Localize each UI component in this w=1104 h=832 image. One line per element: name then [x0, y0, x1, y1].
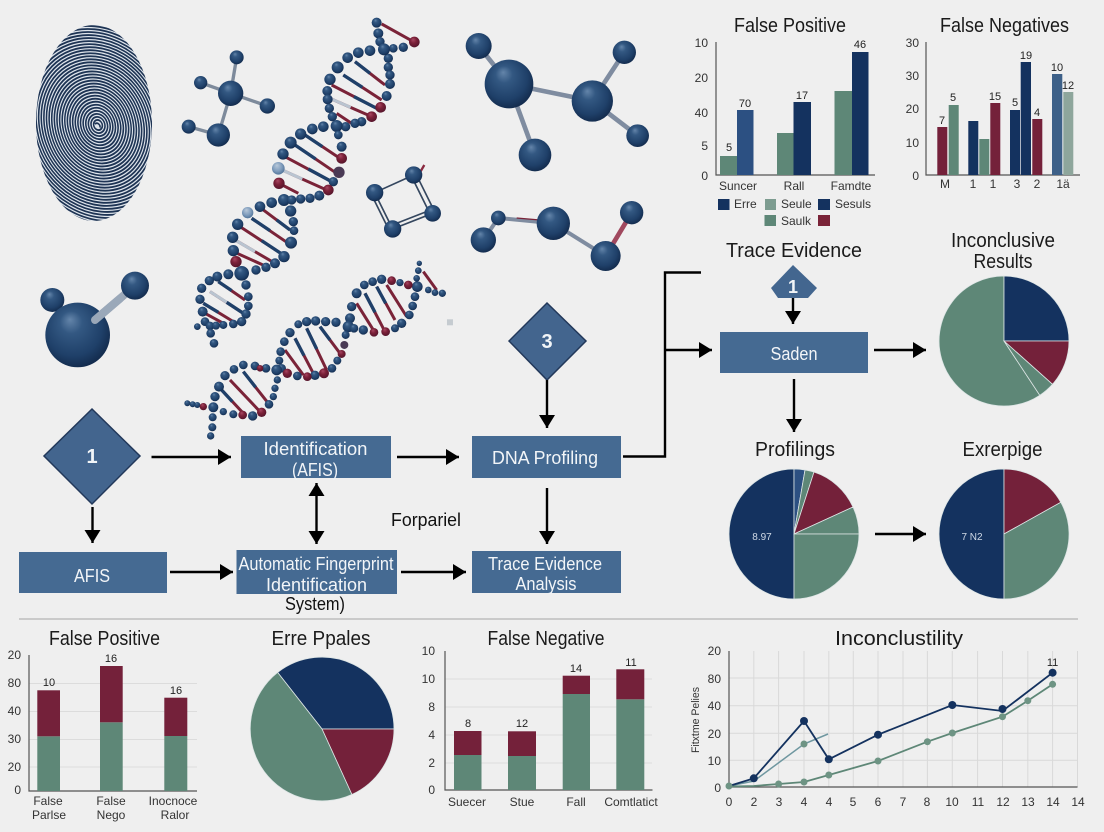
chart: inconclusivity line chart: Fitxtme Pelies: [690, 687, 702, 753]
chart: inconclusivity line chart: 8: [924, 795, 931, 809]
icon: water molecule: [40, 272, 149, 367]
chart: false negatives top: 30: [906, 36, 919, 50]
pie: profilings: [729, 438, 859, 599]
arrows: left flow: [92, 380, 547, 572]
icon: fingerprint: [36, 25, 152, 221]
box: identification AFIS: Identification: [264, 439, 368, 459]
chart: false positive top: 5: [726, 142, 732, 154]
chart: false negatives top: 30: [906, 69, 919, 83]
chart: inconclusivity line chart: 20: [708, 727, 721, 741]
icon: DNA helix lower: [184, 261, 453, 440]
chart: false negative stacked bars: Suecer: [448, 795, 486, 809]
chart: false positive stacked bars: 80: [8, 676, 21, 690]
chart: false negatives top: 1: [970, 177, 977, 191]
pie: erre ppales: [250, 627, 394, 801]
chart: false negatives top: False Negatives: [940, 14, 1069, 37]
chart: false negatives top: [906, 14, 1080, 191]
chart: false positive top: 70: [739, 98, 751, 110]
legend: false positive: Erre: [734, 197, 757, 211]
chart: false negatives top: 12: [1062, 80, 1074, 92]
chart: inconclusivity line chart: 11: [972, 795, 985, 809]
legend: false positive: [718, 197, 871, 228]
chart: false positive stacked bars: 40: [8, 704, 21, 718]
chart: false negatives top: 4: [1034, 107, 1040, 119]
diamond: step 1: [44, 409, 140, 504]
chart: inconclusivity line chart: 10: [708, 754, 721, 768]
divider: [19, 618, 1078, 620]
chart: inconclusivity line chart: 40: [708, 699, 721, 713]
chart: inconclusivity line chart: 14: [1071, 795, 1085, 809]
diamond: trace evidence step 1: [771, 265, 817, 298]
chart: false negative stacked bars: 10: [422, 672, 435, 686]
arrows: right flow: [793, 298, 926, 534]
chart: false positive stacked bars: False: [33, 794, 63, 808]
chart: false negative stacked bars: Fall: [566, 795, 586, 809]
diamond: step 3: 3: [541, 331, 553, 353]
legend: false positive: Saulk: [781, 214, 812, 228]
box: AFIS: [19, 552, 167, 593]
chart: false negative stacked bars: 8: [428, 700, 435, 714]
pie: inconclusive results: Inconclusive: [951, 229, 1055, 252]
chart: inconclusivity line chart: Inconclustility: [835, 627, 964, 650]
pie: profilings: Profilings: [755, 438, 835, 461]
chart: false positive stacked bars: 16: [105, 653, 117, 665]
chart: false positive stacked bars: Inocnoce: [149, 794, 198, 808]
chart: false negatives top: M: [940, 177, 950, 191]
box: automatic fingerprint identification system: Automatic Fingerprint: [238, 554, 394, 574]
chart: inconclusivity line chart: 0: [726, 795, 733, 809]
chart: false positive top: 10: [695, 36, 708, 50]
chart: false negative stacked bars: 11: [625, 657, 637, 669]
chart: false positive stacked bars: 30: [8, 732, 21, 746]
chart: false positive top: Suncer: [719, 179, 757, 193]
label: forparel: Forpariel: [391, 510, 461, 530]
chart: false negatives top: 7: [939, 115, 945, 127]
chart: false positive top: Famdte: [831, 179, 872, 193]
chart: inconclusivity line chart: 80: [708, 672, 721, 686]
chart: false positive top: 40: [695, 106, 708, 120]
chart: inconclusivity line chart: 3: [776, 795, 783, 809]
chart: false positive top: False Positive: [734, 14, 846, 37]
box: trace evidence analysis: [472, 551, 621, 594]
chart: false negatives top: 15: [989, 91, 1001, 103]
chart: false negatives top: 5: [950, 92, 956, 104]
chart: inconclusivity line chart: 4: [801, 795, 808, 809]
box: AFIS: AFIS: [74, 566, 110, 586]
chart: false positive top: 5: [701, 139, 708, 153]
chart: false negatives top: 20: [906, 102, 919, 116]
chart: inconclusivity line chart: 7: [900, 795, 907, 809]
chart: false positive stacked bars: False: [96, 794, 126, 808]
diamond: step 1: 1: [86, 446, 98, 468]
chart: inconclusivity line chart: 0: [714, 781, 721, 795]
chart: false positive top: 20: [695, 71, 708, 85]
box: saden: Saden: [770, 344, 818, 364]
box: DNA profiling: [472, 436, 621, 478]
chart: inconclusivity line chart: 12: [996, 795, 1010, 809]
chart: false negative stacked bars: [422, 627, 658, 809]
icon: small branched molecule: [182, 50, 275, 147]
chart: inconclusivity line chart: 10: [945, 795, 959, 809]
chart: false positive top: Rall: [784, 179, 804, 193]
chart: inconclusivity line chart: 2: [751, 795, 758, 809]
chart: false positive top: [695, 14, 875, 193]
chart: inconclusivity line chart: [690, 627, 1085, 809]
box: automatic fingerprint identification system: System): [285, 594, 345, 614]
chart: inconclusivity line chart: 13: [1021, 795, 1035, 809]
chart: false negative stacked bars: 10: [422, 644, 435, 658]
box: identification AFIS: [241, 436, 391, 480]
box: DNA profiling: DNA Profiling: [492, 448, 598, 468]
box: trace evidence analysis: Analysis: [516, 574, 576, 594]
chart: inconclusivity line chart: 6: [875, 795, 882, 809]
box: automatic fingerprint identification system: Identification: [266, 575, 367, 595]
chart: false negative stacked bars: False Negative: [488, 627, 604, 650]
chart: false positive stacked bars: [8, 627, 198, 822]
chart: false positive stacked bars: Nego: [97, 808, 126, 822]
pie: erre ppales: Erre Ppales: [272, 627, 370, 650]
heading: trace evidence: Trace Evidence: [726, 239, 862, 262]
chart: false negatives top: 0: [912, 169, 919, 183]
chart: false positive top: 17: [796, 90, 808, 102]
icon: ring molecule: [366, 165, 441, 238]
pie: profilings: 8.97: [752, 532, 772, 543]
chart: inconclusivity line chart: 20: [708, 644, 721, 658]
pie: inconclusive results: Results: [974, 250, 1032, 273]
connector: bracket to saden: [623, 272, 712, 456]
chart: false negative stacked bars: 14: [570, 663, 582, 675]
box: saden: [720, 332, 868, 373]
chart: false positive top: 0: [701, 169, 708, 183]
chart: false negative stacked bars: 8: [465, 718, 471, 730]
chart: false positive top: 46: [854, 39, 866, 51]
chart: false negatives top: 10: [1051, 62, 1063, 74]
chart: false negative stacked bars: 4: [428, 728, 435, 742]
chart: inconclusivity line chart: 5: [850, 795, 857, 809]
box: automatic fingerprint identification system: [236, 550, 397, 614]
pie: exrerpige: 7 N2: [961, 532, 983, 543]
chart: inconclusivity line chart: 11: [1047, 657, 1058, 669]
chart: false negatives top: 1: [990, 177, 997, 191]
chart: false positive stacked bars: 10: [43, 677, 55, 689]
chart: false positive stacked bars: Parlse: [32, 808, 66, 822]
chart: false positive stacked bars: 0: [14, 783, 21, 797]
chart: false negatives top: 2: [1034, 177, 1041, 191]
chart: inconclusivity line chart: 4: [826, 795, 833, 809]
legend: false positive: Seule: [781, 197, 812, 211]
chart: false negatives top: 5: [1012, 97, 1018, 109]
icon: chain molecule: [471, 201, 643, 271]
chart: false negative stacked bars: 2: [428, 756, 435, 770]
box: trace evidence analysis: Trace Evidence: [488, 554, 602, 574]
chart: false positive stacked bars: 20: [8, 648, 21, 662]
chart: false negatives top: 3: [1014, 177, 1021, 191]
icon: large four-arm molecule: [466, 33, 649, 171]
chart: false positive stacked bars: Ralor: [161, 808, 189, 822]
chart: false negative stacked bars: 0: [428, 783, 435, 797]
chart: false positive stacked bars: False Positive: [49, 627, 160, 650]
chart: false negatives top: 1ä: [1056, 177, 1070, 191]
diamond: trace evidence step 1: 1: [788, 277, 798, 297]
chart: false positive stacked bars: 20: [8, 760, 21, 774]
chart: false negatives top: 10: [906, 136, 919, 150]
diamond: step 3: [509, 303, 586, 380]
chart: inconclusivity line chart: 14: [1046, 795, 1060, 809]
chart: false negative stacked bars: 12: [516, 718, 528, 730]
icon: DNA helix upper: [194, 18, 420, 348]
pie: inconclusive results: [939, 229, 1069, 406]
pie: exrerpige: [939, 438, 1069, 599]
chart: false negatives top: 19: [1020, 50, 1032, 62]
chart: false negative stacked bars: Comtlatict: [604, 795, 658, 809]
legend: false positive: Sesuls: [835, 197, 871, 211]
pie: exrerpige: Exrerpige: [962, 438, 1042, 461]
box: identification AFIS: (AFIS): [292, 460, 338, 480]
chart: false positive stacked bars: 16: [170, 685, 182, 697]
chart: false negative stacked bars: Stue: [510, 795, 535, 809]
